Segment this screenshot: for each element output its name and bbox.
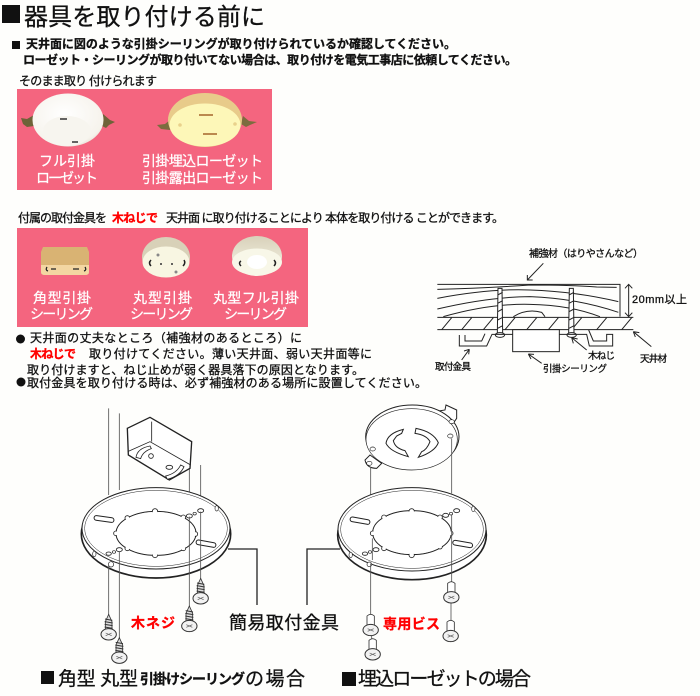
exploded view: embedded rosette [338, 405, 486, 660]
ceiling board [437, 317, 633, 330]
caution text block: 取り付けてください。薄い天井面、弱い天井面等に [89, 346, 372, 361]
mounting lines behind [109, 408, 201, 510]
instruction line: wood screw mounting: 木ねじで [112, 210, 158, 225]
label: round full ceiling: 丸型フル引掛 [213, 290, 299, 306]
icon: rosette disc [365, 405, 459, 470]
instruction line: wood screw mounting [18, 210, 504, 225]
panel: ceiling types [17, 228, 308, 327]
exploded view: square and round ceiling [81, 408, 231, 663]
label: round ceiling [130, 290, 193, 322]
leader lines to bracket label [228, 549, 340, 605]
caution text block [16, 331, 427, 390]
icon: machine screws [363, 582, 459, 660]
caption: square and round ceiling: 角型 丸型 [58, 668, 138, 690]
label: round ceiling: 丸型引掛 [133, 290, 192, 306]
label: full rosette: ローゼット [36, 170, 98, 186]
icon: square ceiling [41, 247, 89, 275]
label: full rosette: フル引掛 [39, 153, 95, 169]
diagram label: bracket: 取付金具 [435, 361, 471, 373]
label: full rosette [36, 153, 98, 186]
icon: round full ceiling [232, 236, 282, 276]
diagram label: ceiling material: 天井材 [640, 353, 667, 365]
title: 器具を取り付ける前に [24, 4, 265, 31]
intro text block: ローゼット・シーリングが取り付いてない場合は、取り付けを電気工事店に依頼してください。 [23, 52, 517, 67]
icon: round ceiling [142, 237, 190, 278]
caption: embedded rosette: 埋込ローゼットの場合 [358, 668, 531, 690]
icon: ceiling box [127, 417, 192, 480]
caution text block: 木ねじで [30, 346, 76, 361]
subheading: can be attached directly: そのまま取り 付けられます [19, 74, 157, 88]
screw lines below ring [371, 515, 452, 640]
diagram label: ceiling fitting: 引掛シーリング [543, 363, 607, 375]
label: dedicated screw: 専用ビス [383, 616, 440, 632]
diagram label: reinforcement: 補強材（はりやさんなど） [529, 247, 643, 260]
icon: mounting ring [338, 488, 486, 580]
label: square ceiling: シーリング [30, 306, 93, 322]
beam wood grain [437, 284, 620, 317]
caution text block: 取り付けますと、ねじ止めが弱く器具落下の原因となります。 [27, 362, 364, 377]
caption: square and round ceiling: の場合 [245, 668, 305, 690]
icon: full rosette [21, 94, 115, 146]
cross-section diagram [437, 263, 651, 363]
diagram label: wood screw: 木ねじ [588, 350, 615, 362]
label: embedded and exposed rosette: 引掛埋込ローゼット [142, 153, 263, 169]
arrows [462, 263, 651, 363]
label: round ceiling: シーリング [130, 306, 193, 322]
label: round full ceiling: シーリング [224, 306, 287, 322]
wood screws [495, 288, 576, 337]
screw lines below ring [109, 512, 201, 638]
diagram label: 20mm: 20mm以上 [632, 293, 687, 306]
icon: wood screws [101, 578, 208, 663]
label: square ceiling: 角型引掛 [33, 290, 91, 306]
mounting lines [371, 438, 452, 495]
instruction line: wood screw mounting: 付属の取付金具を [18, 211, 107, 225]
label: embedded and exposed rosette [142, 153, 263, 186]
ceiling box and brackets [459, 330, 613, 352]
icon: embedded rosette [157, 93, 257, 147]
label: wood screw: 木ネジ [131, 615, 175, 631]
caption: square and round ceiling [41, 668, 305, 690]
caution text block: 取付金具を取り付ける時は、必ず補強材のある場所に設置してください。 [27, 376, 427, 390]
icon: mounting ring [81, 488, 231, 578]
panel: ceiling rosettes [17, 89, 272, 190]
intro text block [12, 36, 517, 67]
caption: square and round ceiling: 引掛けシーリング [140, 671, 245, 687]
label: simple bracket: 簡易取付金具 [229, 613, 339, 633]
label: square ceiling [30, 290, 93, 322]
label: round full ceiling [213, 290, 299, 322]
label: embedded and exposed rosette: 引掛露出ローゼット [142, 170, 263, 186]
instruction line: wood screw mounting: 天井面 に取り付けることにより 本体を取り付ける ことができます。 [166, 210, 504, 225]
intro text block: 天井面に図のような引掛シーリングが取り付けられているか確認してください。 [26, 36, 456, 51]
caution text block: 天井面の丈夫なところ（補強材のあるところ）に [30, 331, 302, 345]
